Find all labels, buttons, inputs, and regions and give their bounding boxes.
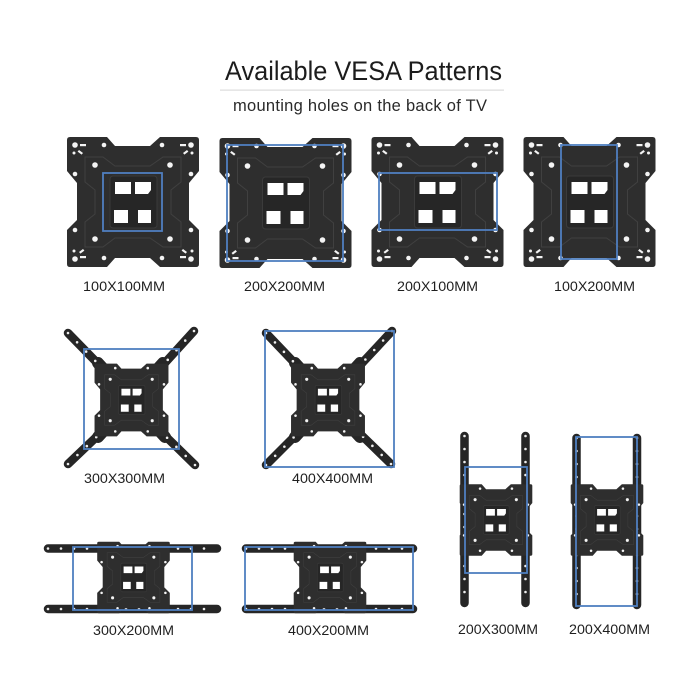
pattern: 400X400MM <box>265 331 394 486</box>
pattern: 200X200MM <box>220 138 352 294</box>
pattern: 100X200MM <box>524 137 656 294</box>
pattern: 400X200MM <box>245 542 413 638</box>
pattern: 400X400MM: 400X400MM <box>292 470 373 486</box>
pattern: 200X400MM: 200X400MM <box>569 621 650 637</box>
pattern: 200X200MM: 200X200MM <box>244 278 325 294</box>
title: Available VESA Patterns <box>225 56 502 86</box>
pattern: 300X200MM: 300X200MM <box>93 622 174 638</box>
pattern: 200X300MM: 200X300MM <box>458 621 538 637</box>
pattern: 200X300MM <box>458 436 538 637</box>
pattern: 300X300MM <box>68 331 195 486</box>
pattern: 100X100MM: 100X100MM <box>83 278 165 294</box>
pattern: 300X200MM <box>48 542 217 638</box>
pattern: 100X100MM <box>67 137 199 294</box>
pattern: 300X300MM: 300X300MM <box>84 470 165 486</box>
subtitle: mounting holes on the back of TV <box>233 97 487 115</box>
pattern: 200X400MM <box>569 437 650 637</box>
pattern: 400X200MM: 400X200MM <box>288 622 369 638</box>
pattern: 100X200MM: 100X200MM <box>554 278 635 294</box>
pattern: 200X100MM: 200X100MM <box>397 278 478 294</box>
pattern: 200X100MM <box>372 137 504 294</box>
